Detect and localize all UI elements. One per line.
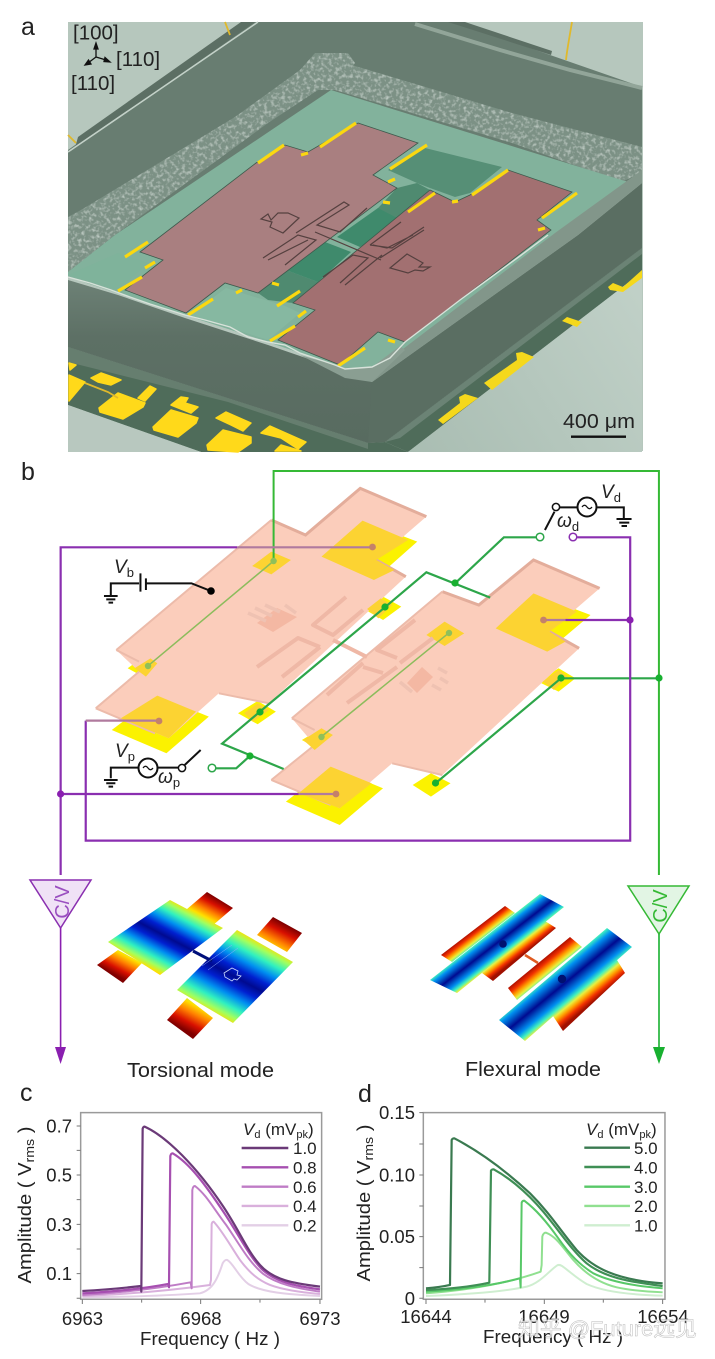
chart d y tick labels: 0.15 <box>379 1102 415 1123</box>
mode captions: Torsional mode <box>127 1060 274 1082</box>
corner lip <box>300 346 405 382</box>
cavity floor <box>68 90 628 375</box>
chart c y tick labels: 0.3 <box>46 1214 72 1235</box>
circuit labels: b <box>127 565 134 580</box>
rough trench right <box>335 63 642 182</box>
scale bar label: 400 μm <box>563 411 635 433</box>
chart c legend text: V <box>243 1120 256 1139</box>
chart c y tick labels <box>46 1116 72 1284</box>
chart c legend text: d <box>254 1129 260 1141</box>
outer strip top left <box>75 22 255 148</box>
circuit black wires <box>104 507 632 787</box>
right proof mass <box>400 667 448 693</box>
curve 0.6 <box>82 1186 320 1295</box>
chart d legend text: 4.0 <box>634 1158 658 1178</box>
circuit labels: ω <box>158 767 173 788</box>
chart d y axis title: Amplitude ( V <box>353 1170 374 1282</box>
gold pad overlaps <box>121 521 577 808</box>
chart c y tick labels: 0.5 <box>46 1164 72 1186</box>
circuit labels: V <box>114 557 127 578</box>
chart c y tick labels: 0.7 <box>46 1116 72 1136</box>
purple wires on plates <box>86 547 565 794</box>
curve 3.0 d <box>426 1201 663 1292</box>
wall lip <box>367 170 642 382</box>
panel b: device plates <box>96 488 600 825</box>
strip upper band left <box>68 347 368 449</box>
crystal orientation labels: [110] <box>71 72 115 95</box>
scale bar <box>571 436 626 438</box>
curve 4.0 d <box>426 1169 663 1290</box>
chart d y tick labels: 0.05 <box>379 1226 415 1247</box>
yellow electrode strips <box>118 123 577 366</box>
chart d legend text: 3.0 <box>634 1178 658 1197</box>
chart d legend text: V <box>586 1120 599 1139</box>
green top wire <box>274 471 659 875</box>
chart d legend text: 5.0 <box>634 1139 658 1158</box>
purple C/V amplifier: C/V <box>52 885 74 919</box>
chart c legend text: ) <box>308 1120 314 1139</box>
right plate <box>271 560 600 808</box>
chart d x tick labels: 16649 <box>518 1306 570 1327</box>
chart c legend text <box>243 1120 317 1236</box>
chart c legend text: 1.0 <box>293 1139 317 1158</box>
light green sense wires <box>148 561 449 737</box>
circuit labels: V <box>115 741 128 762</box>
circuit labels <box>114 482 621 790</box>
right yellow tracks <box>438 270 642 424</box>
floor pad bottom <box>190 288 300 340</box>
chart d legend text: 1.0 <box>634 1216 658 1236</box>
crystal axes icon <box>85 43 110 65</box>
chart d: flexural amplitude <box>353 1102 689 1347</box>
chart d y axis title: rms <box>361 1136 376 1160</box>
circuit labels: ω <box>557 511 572 532</box>
chart c: torsional amplitude <box>14 1113 341 1349</box>
green output line and arrow <box>653 934 665 1064</box>
watermark: 知乎 @Future远见 <box>518 1318 697 1341</box>
floor pad left <box>68 253 148 290</box>
bottom left surface strip <box>68 347 408 452</box>
panel label a: a <box>21 13 35 41</box>
green C/V amplifier: C/V <box>650 889 672 923</box>
crystal orientation labels: [100] <box>73 22 119 44</box>
curve 5.0 d <box>426 1138 663 1288</box>
circuit labels: p <box>128 749 135 764</box>
rough rim line <box>68 235 548 369</box>
mode captions <box>127 1059 601 1082</box>
chart c x tick labels <box>62 1308 341 1329</box>
chart c legend text: 0.6 <box>293 1178 317 1197</box>
legend lines d <box>584 1148 630 1225</box>
front wall left <box>68 280 385 443</box>
flexural mode map <box>430 894 632 1041</box>
panel label d: d <box>358 1080 372 1108</box>
chart c legend text: 0.8 <box>293 1158 317 1178</box>
torsional mode map <box>97 892 302 1039</box>
purple output line and arrow <box>55 928 66 1064</box>
outer strip top right <box>448 22 552 55</box>
chart d legend text: (mV <box>603 1120 640 1139</box>
chart c legend text: pk <box>296 1129 308 1141</box>
purple C/V amplifier <box>30 880 91 928</box>
chart c y axis title: Amplitude ( V <box>14 1172 35 1284</box>
chart c legend text: 0.2 <box>293 1216 317 1236</box>
chart c y tick labels: 0.1 <box>46 1263 72 1284</box>
bottom right ground <box>408 272 642 452</box>
panel label b: b <box>21 458 35 486</box>
dark gap centre lower <box>286 242 351 282</box>
green drive network <box>214 537 659 783</box>
centre narrow gap lower <box>258 270 318 303</box>
dark gap top right <box>388 148 502 197</box>
left plate <box>96 488 426 738</box>
left proof mass <box>248 605 297 632</box>
chart d x tick labels: 16644 <box>400 1306 452 1327</box>
chart c legend text: 0.4 <box>293 1197 317 1216</box>
curve 1.0 d <box>426 1265 663 1296</box>
left plate <box>125 123 418 313</box>
etched trench pattern <box>261 202 430 285</box>
plate side edge shading <box>96 520 442 805</box>
chart d y axis title: ) <box>353 1124 374 1137</box>
chart d legend text: 2.0 <box>634 1197 658 1216</box>
curve 2.0 d <box>426 1233 663 1293</box>
green C/V amplifier <box>628 886 689 934</box>
right plate <box>278 170 572 365</box>
bottom left yellow pads <box>69 363 306 452</box>
dark gap centre upper <box>337 208 401 247</box>
gold wires <box>68 22 572 398</box>
micrograph background <box>68 22 643 451</box>
chart c y axis title: ) <box>14 1126 35 1139</box>
chart d legend text: pk <box>639 1129 651 1141</box>
curve 1.0 <box>82 1127 320 1292</box>
legend lines c <box>242 1148 288 1225</box>
chart d legend text: d <box>597 1129 603 1141</box>
chart d legend text: ) <box>651 1120 657 1139</box>
AC source Vd <box>578 498 596 516</box>
chart d y tick labels: 0 <box>405 1288 415 1309</box>
plate edge shading <box>271 488 600 648</box>
chart d legend text <box>586 1120 658 1236</box>
crystal orientation labels: [110] <box>116 48 160 71</box>
rim highlight left <box>68 22 258 152</box>
curve 0.2 <box>82 1260 320 1297</box>
chart c y axis title: rms <box>22 1138 37 1162</box>
chart d y tick labels: 0.10 <box>379 1164 415 1186</box>
panel label c: c <box>20 1079 32 1107</box>
curve 0.8 <box>82 1153 320 1293</box>
rough trench left <box>68 53 355 272</box>
yellow electrode pads under plates <box>112 521 591 825</box>
centre narrow gap upper <box>362 183 430 235</box>
crystal orientation labels <box>71 22 160 95</box>
bottom right strip <box>385 248 642 452</box>
chart d x tick labels: 16654 <box>637 1306 689 1327</box>
circuit labels: d <box>614 490 621 505</box>
chart c x tick labels: 6963 <box>62 1308 103 1329</box>
chart c x axis title: Frequency ( Hz ) <box>140 1328 280 1349</box>
panel b: wiring <box>61 471 659 875</box>
front wall right <box>368 183 642 443</box>
back walls <box>68 22 642 272</box>
chart d y tick labels <box>379 1102 415 1309</box>
AC source Vp <box>138 758 158 778</box>
chart d x axis title: Frequency ( Hz ) <box>483 1326 623 1347</box>
curve 0.4 <box>82 1222 320 1296</box>
circuit labels: V <box>601 482 614 503</box>
circuit labels: p <box>173 775 180 790</box>
chart c x tick labels: 6968 <box>180 1308 222 1329</box>
panel a: micrograph <box>68 22 643 452</box>
circuit labels: d <box>572 519 579 534</box>
chart c x tick labels: 6973 <box>299 1308 341 1329</box>
rim highlight right <box>415 24 642 88</box>
chart c frame and ticks <box>77 1113 322 1304</box>
chart d x tick labels <box>400 1306 689 1327</box>
bottom left ground <box>68 405 201 452</box>
spring beams <box>257 597 433 703</box>
chart d frame and ticks <box>419 1113 665 1304</box>
purple wires <box>61 537 630 875</box>
mode captions: Flexural mode <box>465 1059 601 1081</box>
circuit nodes <box>57 503 663 798</box>
chart c legend text: (mV <box>260 1120 297 1139</box>
strip upper band right <box>385 248 642 442</box>
